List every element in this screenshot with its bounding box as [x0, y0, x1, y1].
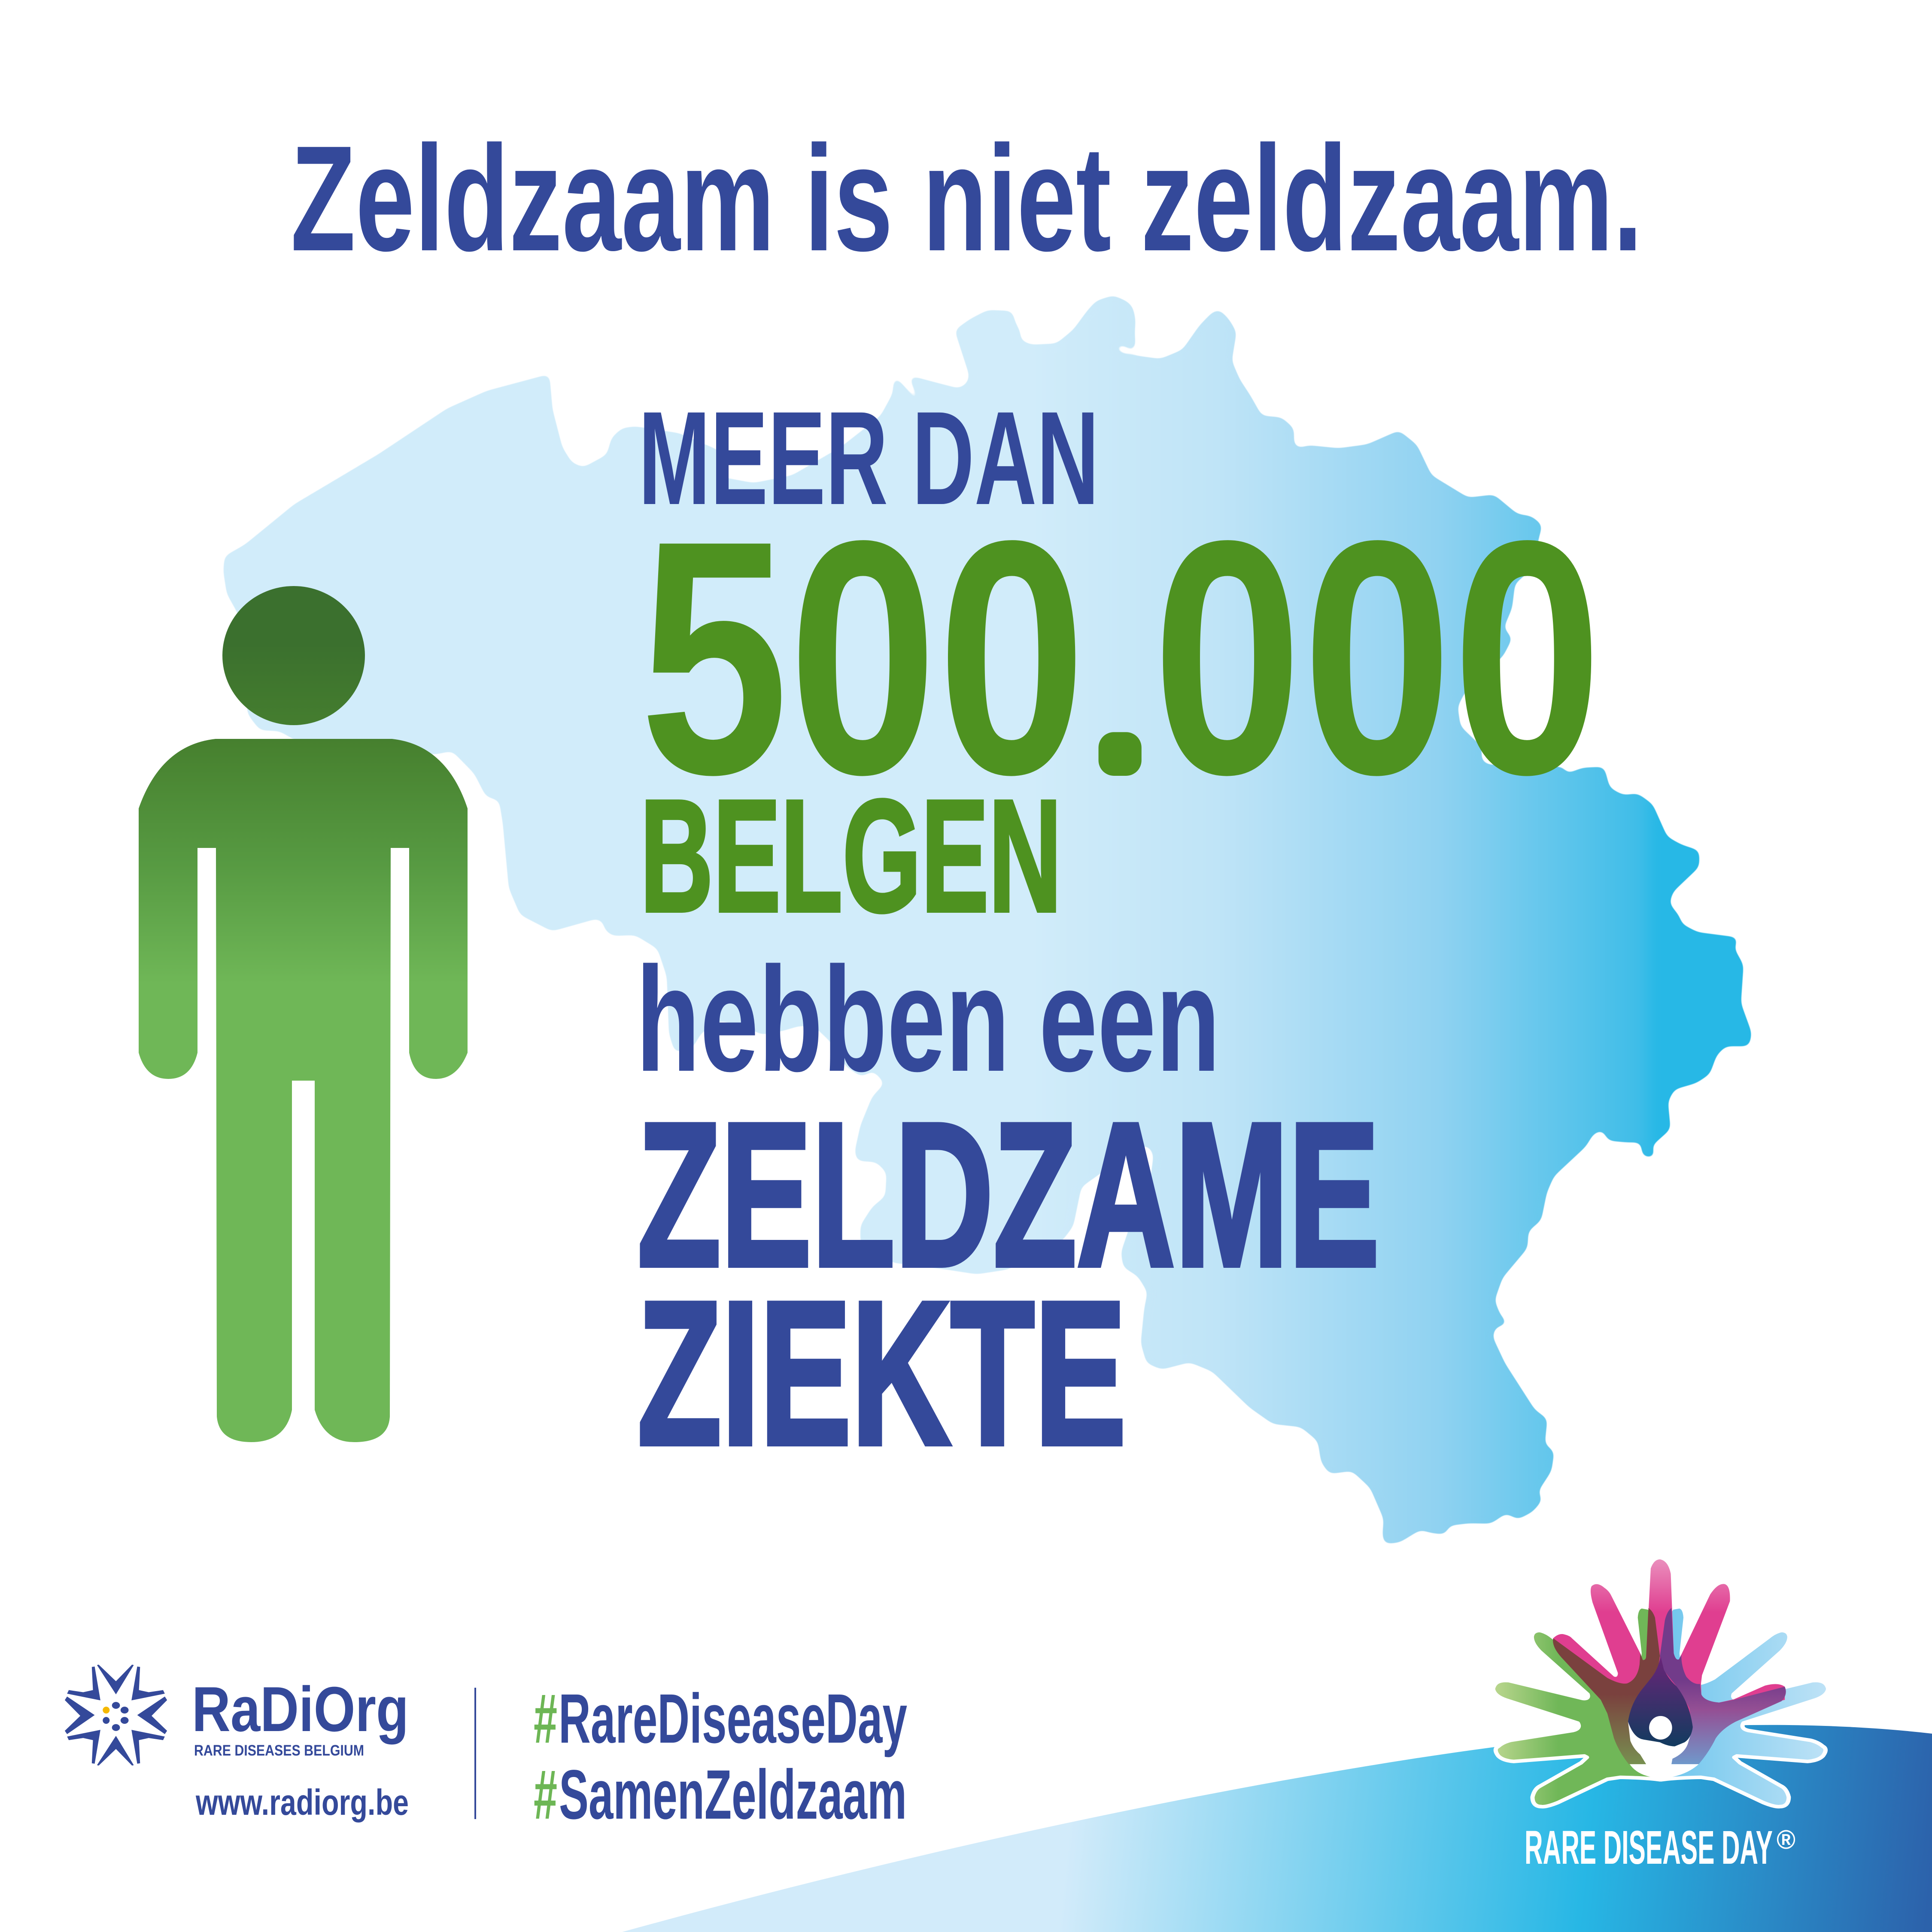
- blue hand: [1661, 1607, 1828, 1807]
- number: 500.000: 500: [640, 472, 1086, 844]
- white figure body: [1628, 1722, 1699, 1780]
- blue swoosh: [622, 1725, 1932, 1932]
- hashtag: SamenZeldzaam: [534, 1755, 907, 1834]
- number: 500.000: [640, 472, 1602, 844]
- hashtag: RareDiseaseDay: #: [534, 1679, 557, 1758]
- person icon: [139, 586, 468, 1442]
- pink hand: [1553, 1559, 1785, 1722]
- text: ziekte: ZIEKTE: [638, 1259, 1126, 1487]
- divider: [474, 1688, 476, 1819]
- overlap: purple: [1660, 1608, 1786, 1764]
- hashtag: RareDiseaseDay: RareDiseaseDay: [559, 1679, 907, 1758]
- hashtag: SamenZeldzaam: #: [534, 1755, 557, 1834]
- number: 500.000: 000: [1152, 472, 1602, 844]
- overlap: brown: [1553, 1608, 1660, 1764]
- hashtag: RareDiseaseDay: [534, 1679, 907, 1758]
- registered mark: ®: [1777, 1825, 1795, 1855]
- dark drop: [1628, 1656, 1693, 1747]
- RaDiOrg tagline: RARE DISEASES BELGIUM: [194, 1742, 364, 1759]
- text: belgen: BELGEN: [640, 766, 1062, 945]
- green hand: [1493, 1607, 1660, 1807]
- person body: [139, 739, 468, 1442]
- text: hebben een: hebben een: [636, 936, 1220, 1103]
- white figure head: [1649, 1716, 1672, 1740]
- number: 500.000: .: [1108, 683, 1132, 779]
- logo: Rare Disease Day hands: [1493, 1559, 1828, 1807]
- logo: RaDiOrg star: [65, 1665, 167, 1765]
- map of Belgium: [225, 297, 1750, 1543]
- text: meer dan: MEER DAN: [638, 383, 1099, 532]
- website: www.radiorg.be: [195, 1782, 409, 1823]
- RaDiOrg wordmark: RaDiOrg: [192, 1674, 409, 1745]
- text: zeldzame: ZELDZAME: [638, 1080, 1379, 1309]
- hashtag: SamenZeldzaam: SamenZeldzaam: [559, 1755, 907, 1834]
- person head: [222, 586, 365, 725]
